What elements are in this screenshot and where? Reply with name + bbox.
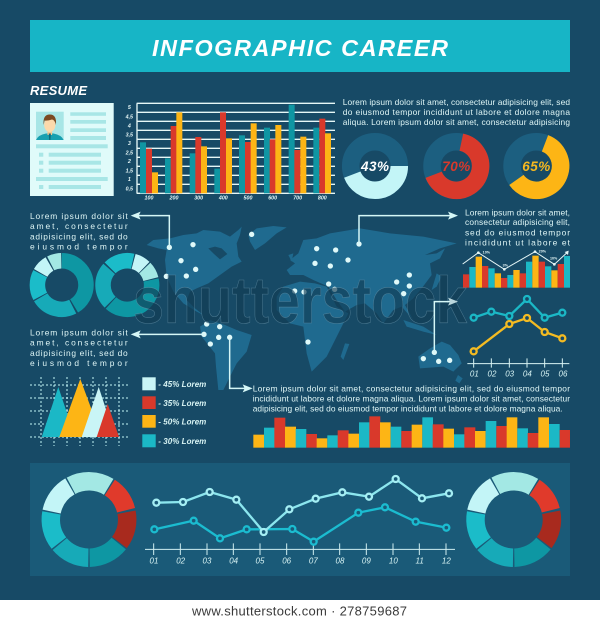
- bar chart: resume scores: 2: [127, 159, 131, 165]
- bar chart: resume scores: 400: [218, 195, 228, 201]
- arrow: to upper right text: [359, 212, 458, 244]
- bar chart: resume scores: 5: [128, 105, 132, 111]
- line chart: six periods: 03: [505, 370, 515, 379]
- bar chart: resume scores: 200: [169, 195, 178, 201]
- donut: bottom right: [460, 466, 567, 573]
- text block: top right: do eiusmod tempor incididunt ut labore et dolore magna: [343, 107, 570, 117]
- combo chart: bars with trend line: 3%: [503, 263, 509, 267]
- bar chart: resume scores: 600: [268, 195, 277, 201]
- triangle chart: [30, 377, 130, 446]
- text block: upper left: amet, consectetur: [30, 221, 128, 231]
- text block: center bottom: [253, 384, 570, 414]
- combo chart: bars with trend line: [463, 249, 570, 288]
- text block: center bottom: incididunt ut labore et dolore magna aliqua. Lorem ipsum dolor sit amet, consectetur: [253, 394, 570, 404]
- text block: upper left: [30, 211, 128, 252]
- text block: upper left: eiusmod tempor: [30, 242, 128, 252]
- text block: top right: Lorem ipsum dolor sit amet, consectetur adipisicing elit, sed: [343, 97, 570, 107]
- bar chart: resume scores: 1,5: [126, 169, 134, 175]
- panel: bottom timeline: [30, 463, 570, 576]
- line chart: six periods: 05: [541, 370, 550, 379]
- line chart: twelve periods: 11: [416, 556, 424, 565]
- donut: 43%: [351, 142, 399, 190]
- map city dots: [164, 232, 452, 364]
- line chart: twelve periods: 03: [203, 556, 212, 565]
- text block: upper left: Lorem ipsum dolor sit: [30, 211, 128, 221]
- line chart: twelve periods: 06: [282, 556, 292, 565]
- line chart: six periods: 01: [470, 370, 479, 379]
- bar chart: resume scores: 700: [293, 195, 302, 201]
- text block: lower left: eiusmod tempor: [30, 358, 128, 368]
- bar chart: resume scores: 4,5: [125, 115, 134, 121]
- footer: image id: [0, 600, 600, 620]
- world map: [147, 226, 463, 390]
- text block: upper right: incididunt ut labore et: [465, 238, 571, 248]
- donut: 65%: 65%: [522, 159, 550, 174]
- line chart: six periods: [467, 296, 569, 379]
- legend: - 50% Lorem: [158, 418, 206, 426]
- combo chart: bars with trend line: 10%: [483, 251, 491, 255]
- bar chart: resume scores: 100: [145, 195, 153, 201]
- arrow: to right line chart: [434, 298, 458, 352]
- text block: top right: [343, 97, 570, 127]
- bar chart: long row: [253, 416, 570, 448]
- line chart: twelve periods: 08: [336, 556, 345, 565]
- line chart: twelve periods: 10: [389, 556, 398, 565]
- bar chart: resume scores: 3: [128, 141, 131, 147]
- text block: upper right: sed do eiusmod tempor: [465, 227, 570, 237]
- line chart: twelve periods: 04: [229, 556, 239, 565]
- line chart: twelve periods: 12: [442, 556, 451, 565]
- donut: 70%: [427, 137, 485, 195]
- text block: lower left: amet, consectetur: [30, 338, 128, 348]
- line chart: six periods: 06: [559, 370, 568, 379]
- text block: upper left: adipisicing elit, sed do: [30, 232, 128, 242]
- arrow: to lower left text: [131, 330, 204, 338]
- line chart: twelve periods: 09: [362, 556, 371, 565]
- donut: right segmented: [93, 251, 162, 319]
- watermark: shutterstock: [133, 263, 467, 337]
- text block: lower left: Lorem ipsum dolor sit: [30, 328, 128, 338]
- legend: - 30% Lorem: [158, 437, 206, 446]
- bar chart: resume scores: 800: [318, 195, 327, 201]
- bar chart: resume scores: 500: [244, 195, 252, 201]
- bar chart: resume scores: 300: [194, 195, 203, 201]
- combo chart: bars with trend line: 20%: [539, 249, 547, 253]
- text block: top right: aliqua. Lorem ipsum dolor sit amet, consectetur adipisicing: [343, 117, 570, 127]
- line chart: twelve periods: 02: [176, 556, 186, 565]
- title banner: INFOGRAPHIC CAREER: [152, 35, 448, 61]
- arrow: to upper left text: [131, 212, 169, 247]
- text block: upper right: [465, 207, 571, 248]
- bar chart: resume scores: 1: [128, 177, 131, 183]
- legend: [142, 377, 206, 447]
- legend: - 45% Lorem: [158, 380, 206, 389]
- line chart: twelve periods: 07: [309, 556, 318, 565]
- donut: 65%: [505, 135, 568, 197]
- text block: center bottom: adipisicing elit, sed do eiusmod tempor incididunt ut labore et dolore magna aliqua.: [253, 404, 563, 414]
- resume card: [30, 103, 114, 196]
- line chart: twelve periods: 01: [150, 556, 158, 565]
- footer: image id: www.shutterstock.com · 278759687: [191, 604, 407, 618]
- heading: resume: RESUME: [30, 83, 87, 98]
- donut: 43%: 43%: [360, 159, 389, 174]
- text block: upper right: consectetur adipisicing elit,: [465, 217, 570, 227]
- bar chart: resume scores: 3,5: [126, 133, 134, 139]
- icon: portrait: [36, 112, 64, 140]
- line chart: twelve periods: 05: [256, 556, 265, 565]
- line chart: twelve periods: [145, 476, 455, 565]
- text block: center bottom: Lorem ipsum dolor sit amet, consectetur adipisicing elit, sed do eiusmod tempor: [253, 384, 570, 394]
- text block: lower left: adipisicing elit, sed do: [30, 348, 128, 358]
- bar chart: resume scores: 4: [127, 123, 131, 129]
- bar chart: resume scores: 2,5: [125, 151, 134, 157]
- text block: lower left: [30, 328, 128, 368]
- line chart: six periods: 04: [523, 370, 532, 379]
- donut: bottom left: [35, 466, 143, 573]
- bar chart: resume scores: 0,5: [126, 186, 134, 192]
- donut: left segmented: [29, 252, 95, 318]
- line chart: six periods: 02: [488, 370, 497, 379]
- bar chart: resume scores: [125, 103, 335, 201]
- title banner: [30, 20, 570, 72]
- donut: 70%: 70%: [442, 159, 470, 174]
- arrow: to center bottom text: [230, 337, 253, 392]
- legend: - 35% Lorem: [158, 399, 206, 408]
- combo chart: bars with trend line: 10%: [550, 256, 558, 260]
- text block: upper right: Lorem ipsum dolor sit amet,: [465, 207, 570, 217]
